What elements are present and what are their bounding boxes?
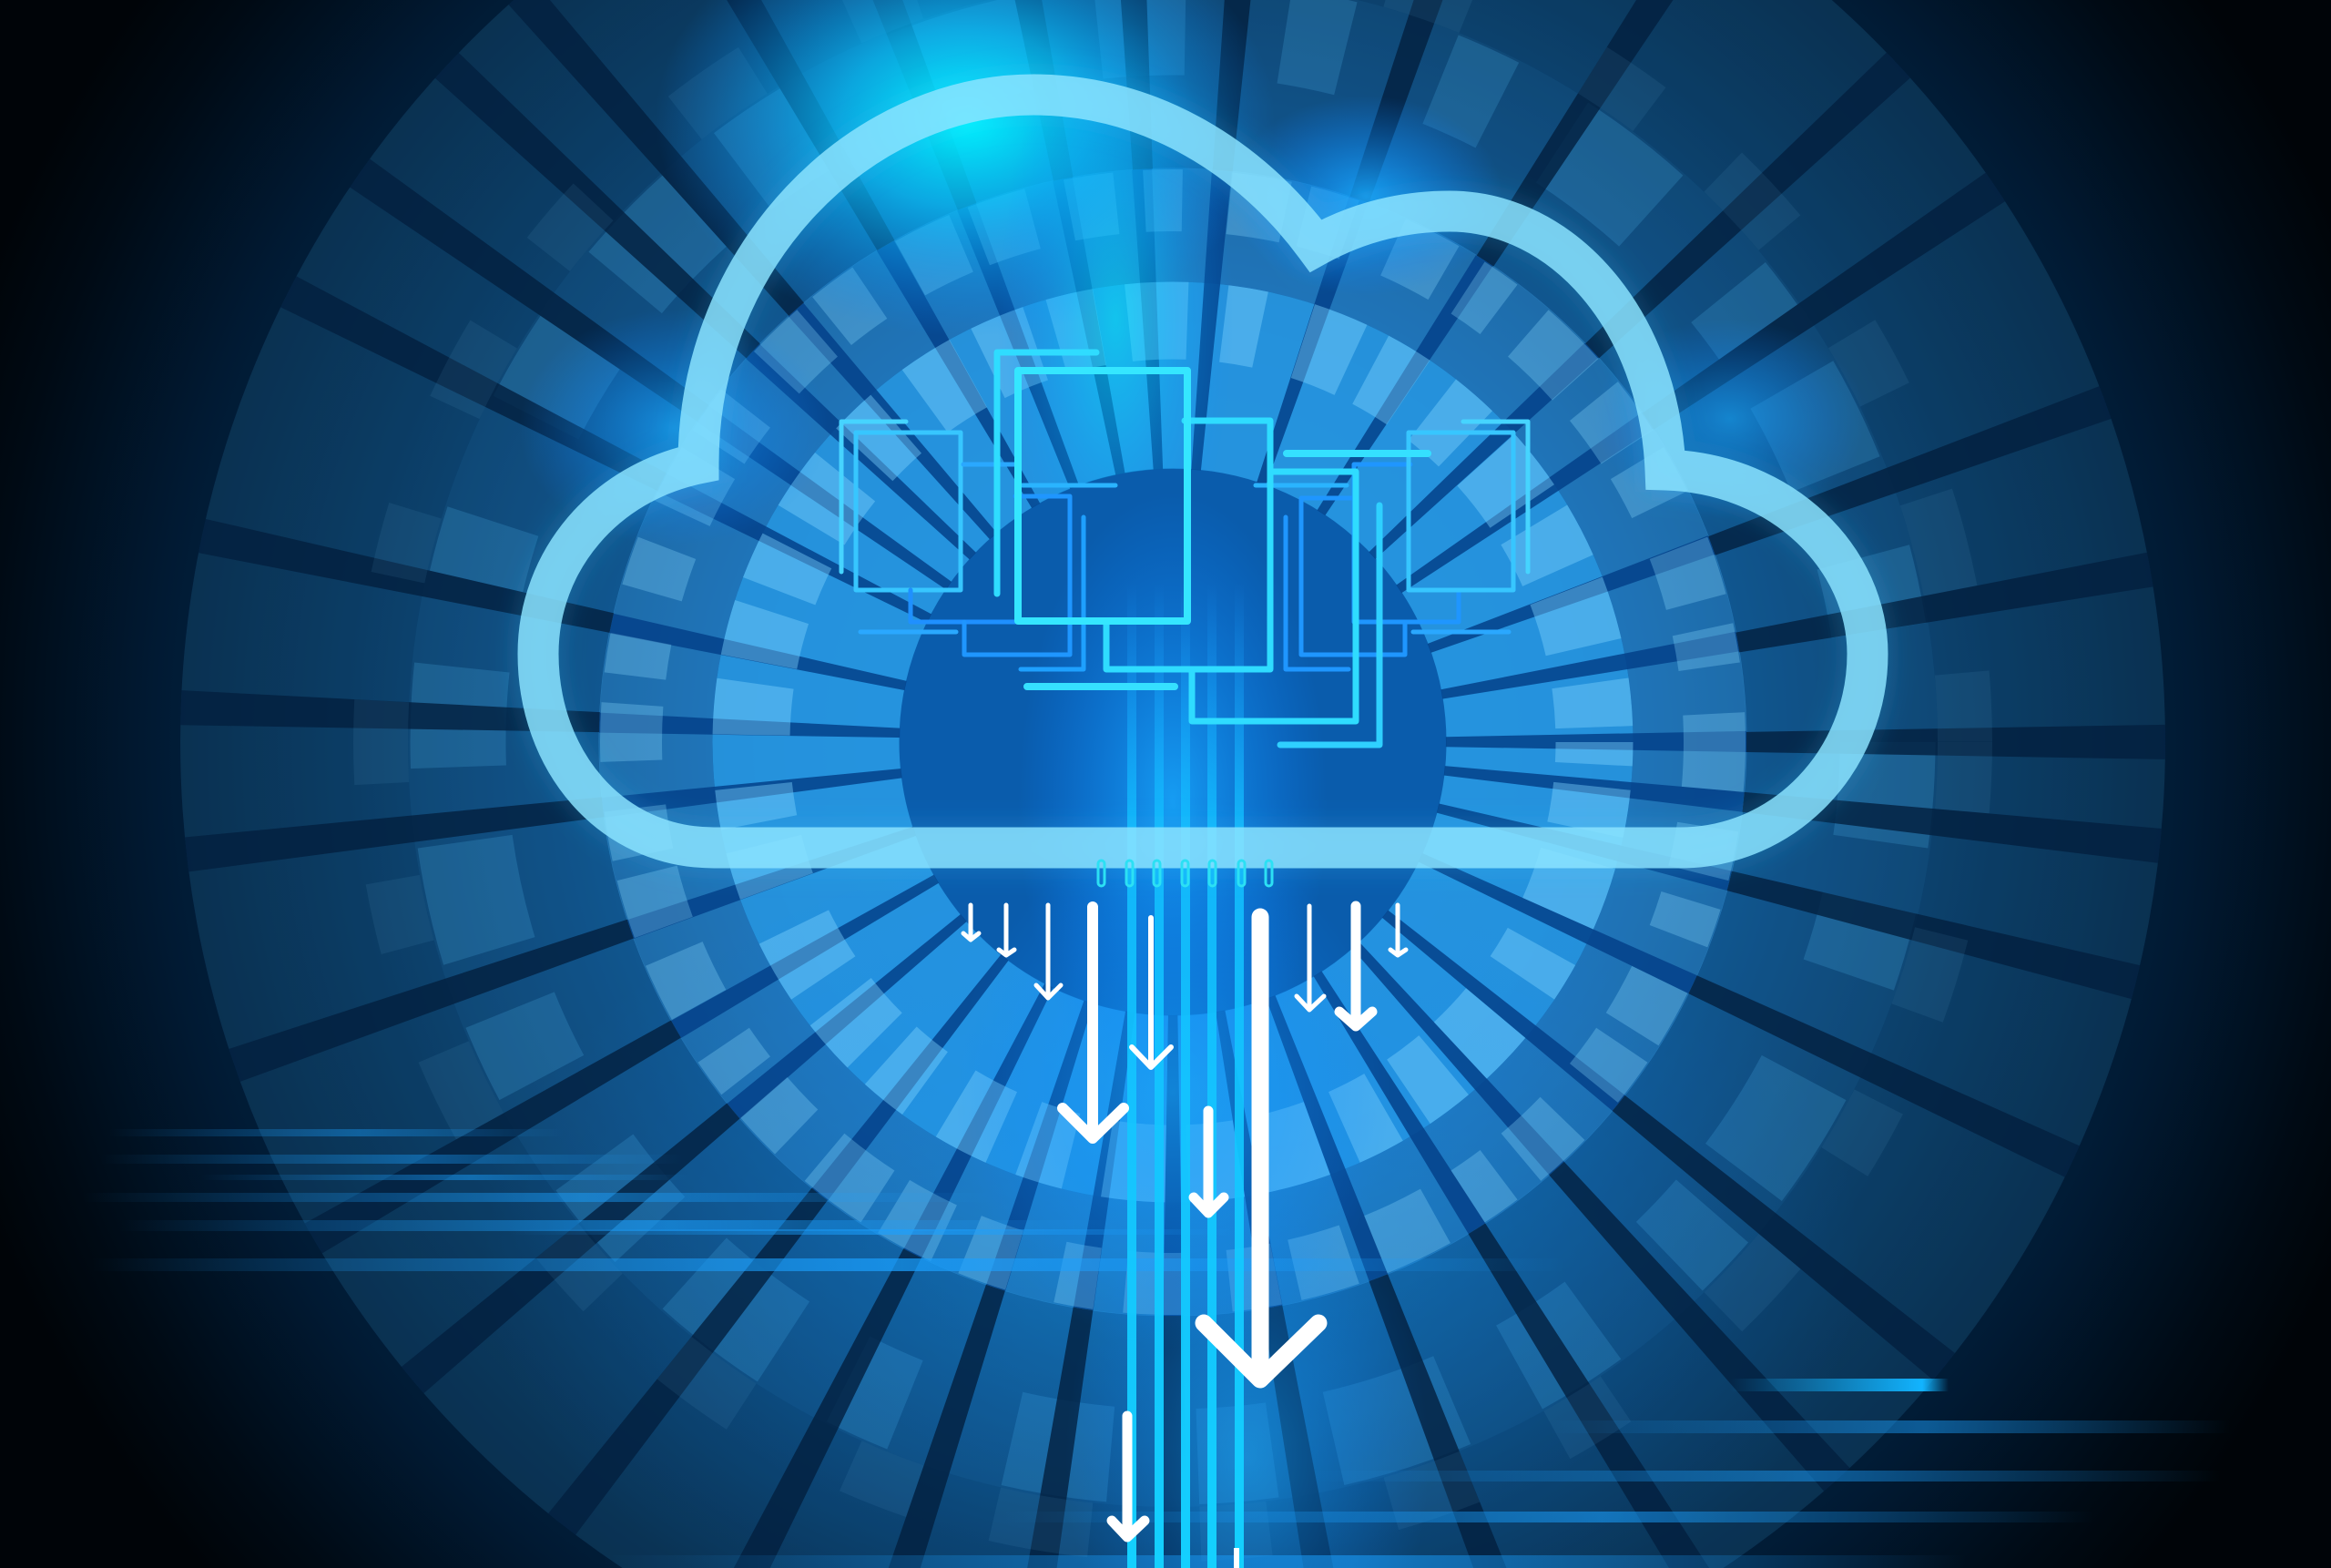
back document outline	[997, 352, 1096, 594]
arrow 6	[1194, 1111, 1224, 1213]
lower right document outline	[1192, 472, 1356, 721]
horizontal light streaks: left	[82, 1129, 1566, 1271]
arrow 8	[1297, 906, 1324, 1010]
arrow 11	[1112, 1416, 1145, 1537]
right middle document	[1256, 464, 1459, 669]
dark radial rays: outer fan	[390, 0, 1956, 1525]
arrow 12	[1234, 1548, 1239, 1568]
arrow 5	[1132, 918, 1171, 1067]
arrow 2	[999, 905, 1014, 955]
right small document	[1409, 422, 1528, 632]
horizontal light streaks: right	[601, 1379, 2231, 1568]
arrow 9	[1339, 906, 1372, 1026]
connector capsules under cloud	[1098, 860, 1272, 886]
accent bars	[1027, 453, 1428, 687]
vertical data lines	[1127, 583, 1244, 1568]
left middle document	[964, 485, 1115, 669]
vertical central glow	[993, 529, 1404, 1568]
radial rings: bright segment highlights	[381, 0, 1965, 1534]
lower glow across the rings	[606, 1073, 1736, 1568]
top glow behind cloud	[519, 0, 1867, 619]
inner dark disc	[900, 469, 1446, 1015]
left small document	[841, 422, 1015, 632]
radial rings: translucent concentric bands	[294, 0, 2051, 1568]
arrow 4	[1063, 907, 1124, 1138]
cloud glow	[538, 95, 1868, 848]
arrow 1	[963, 905, 979, 940]
cloud outline	[538, 95, 1868, 848]
arrow 7: large	[1204, 917, 1318, 1380]
dark radial rays: inner fan	[886, 455, 1460, 1029]
arrow 3	[1036, 905, 1061, 998]
main document	[1018, 371, 1187, 621]
download arrows	[963, 905, 1406, 1568]
right bracket line	[1280, 505, 1379, 745]
arrow 10	[1390, 905, 1406, 955]
documents diagram inside the cloud	[841, 352, 1528, 745]
tall right document outline	[1106, 421, 1270, 669]
